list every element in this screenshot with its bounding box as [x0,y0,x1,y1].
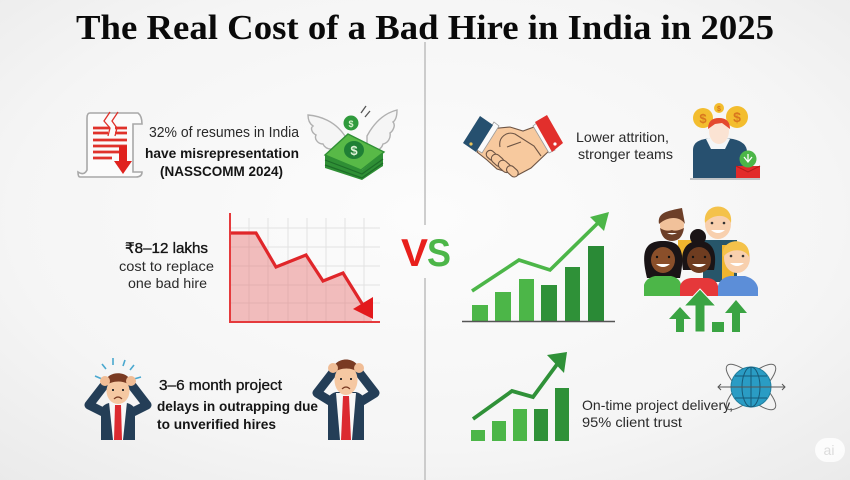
icon: happy diverse team with up arrows [644,206,758,332]
text: project delays [157,378,318,432]
text: project delays: to unverified hires [157,417,276,432]
text: project delays: delays in outrapping due [157,399,318,414]
text: on-time delivery [582,397,733,430]
text: resume misrepresentation: 32% of resumes in India [149,125,300,141]
heading: VS: V [401,232,428,275]
text: replacement cost: one bad hire [128,275,207,291]
chart: rising bars with arrow [462,212,615,322]
heading: VS: S [427,232,451,275]
badge: ai watermark [815,438,845,462]
icon: torn resume with red arrow [78,112,142,177]
team member: woman in red [680,229,718,296]
icon: businessperson with coins and envelope: $ [733,109,741,125]
icon: money with wings: $ [350,143,358,158]
icon: businessperson with coins and envelope: $ [699,111,707,126]
text: resume misrepresentation: (NASSCOMM 2024) [160,164,283,179]
chart: rising delivery bars [471,352,569,441]
text: project delays: 3–6 month project [159,378,282,394]
icon: stressed man [317,360,375,440]
icon: globe with orbits [718,358,785,416]
icon: businessperson with coins and envelope: $ [717,106,721,113]
panel: left column, bad hire costs [78,106,397,440]
text: resume misrepresentation [145,125,300,179]
icon: handshake [463,115,563,179]
team member: blond man in blue [718,241,758,296]
badge: ai watermark: ai [824,442,834,458]
icon: businessperson with coins and envelope [690,103,760,179]
text: lower attrition: Lower attrition, [576,129,669,145]
text: on-time delivery: 95% client trust [582,414,682,430]
icon: money with wings [308,106,397,180]
team member: bearded man [659,208,700,262]
team member: blond man [703,206,737,282]
title: The Real Cost of a Bad Hire in India in 2025 [76,8,774,47]
text: lower attrition [576,129,673,162]
chart: falling cost line [230,213,380,322]
up arrows [669,289,747,332]
panel: right column, good hire benefits [462,103,785,441]
text: on-time delivery: On-time project delivery, [582,397,733,413]
text: resume misrepresentation: have misrepresentation [145,146,299,161]
text: replacement cost [119,241,214,291]
text: replacement cost: ₹8–12 lakhs [125,241,208,257]
text: replacement cost: cost to replace [119,258,214,274]
text: lower attrition: stronger teams [578,146,673,162]
icon: money with wings: $ [348,119,354,129]
icon: stressed man with blue rays [89,358,147,440]
heading: VS [401,232,451,275]
team member: woman in green [644,241,682,296]
